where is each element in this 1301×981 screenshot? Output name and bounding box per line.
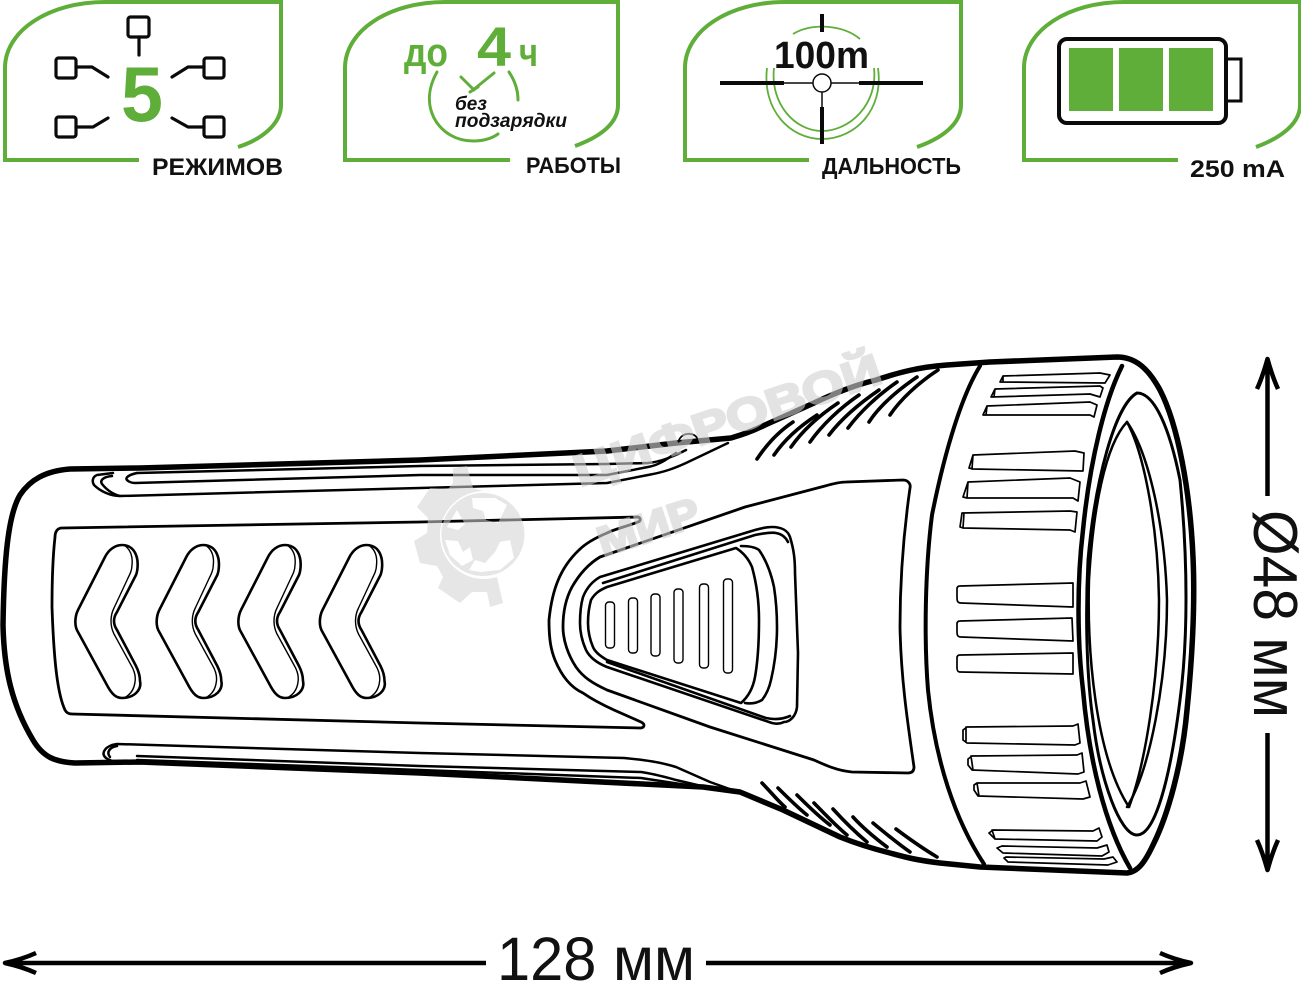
panel: runtime: [345, 2, 621, 178]
top grip strip: [93, 443, 728, 496]
top neck hatch: [757, 370, 938, 459]
text: without recharge: подзарядки: [455, 111, 567, 132]
watermark: gear logo: [414, 466, 524, 607]
slider button: [588, 546, 777, 703]
panel: range: [685, 2, 961, 179]
icon: clock: [429, 72, 518, 141]
bezel back edge: [926, 366, 984, 864]
runtime value: ч: [519, 31, 538, 75]
icon: range rings: [766, 27, 879, 139]
watermark: text top: ЦИФРОВОЙ: [567, 343, 888, 496]
arrow: diameter top: [1257, 359, 1278, 496]
label: runtime: РАБОТЫ: [526, 153, 621, 178]
icon: crosshair: [720, 14, 923, 144]
label: range: ДАЛЬНОСТЬ: [822, 153, 961, 179]
lens: [1089, 422, 1167, 807]
text: without recharge: без: [455, 94, 487, 115]
arrow: diameter bottom: [1257, 733, 1278, 870]
bottom neck hatch: [762, 783, 937, 857]
bottom grip strip: [104, 744, 738, 792]
body outline: [3, 357, 1194, 873]
bezel ribs: [957, 373, 1117, 865]
panel frame: range: [685, 2, 961, 160]
arrow: length right: [706, 953, 1191, 973]
dimension: length: [5, 925, 1191, 981]
label: capacity: 250 mA: [1190, 156, 1285, 183]
label: modes: РЕЖИМОВ: [152, 154, 283, 181]
number: 5: 5: [121, 50, 163, 138]
arrow: length left: [5, 953, 486, 973]
handle grip panel: [52, 517, 644, 728]
runtime value: до: [404, 31, 448, 75]
power button bump: [678, 434, 698, 444]
watermark: text bottom: МИР: [591, 488, 706, 566]
text: without recharge: [455, 94, 567, 132]
panel: battery: [1024, 2, 1300, 183]
panel frame: runtime: [345, 2, 618, 160]
panel frame: battery: [1024, 2, 1300, 160]
icon: battery: [1059, 39, 1241, 123]
chevron 3: [238, 545, 303, 698]
watermark: [414, 343, 888, 607]
slider ribs: [606, 579, 732, 673]
chevron 1: [75, 545, 140, 698]
runtime value: 4: [477, 15, 511, 78]
dimension: diameter: [1240, 359, 1301, 870]
chevron 2: [157, 545, 222, 698]
value: 100m: 100m: [774, 35, 869, 77]
bezel front edge: [1078, 366, 1130, 868]
rim inner ellipse: [1087, 393, 1186, 835]
neck panel: [563, 480, 914, 773]
panel: 5 modes: [5, 2, 283, 181]
panel frame: modes: [5, 2, 281, 160]
icon: mode switches: [56, 17, 224, 137]
chevron 4: [320, 545, 385, 698]
flashlight drawing: [3, 357, 1194, 873]
runtime value: [404, 15, 538, 78]
slider housing: [580, 527, 798, 724]
